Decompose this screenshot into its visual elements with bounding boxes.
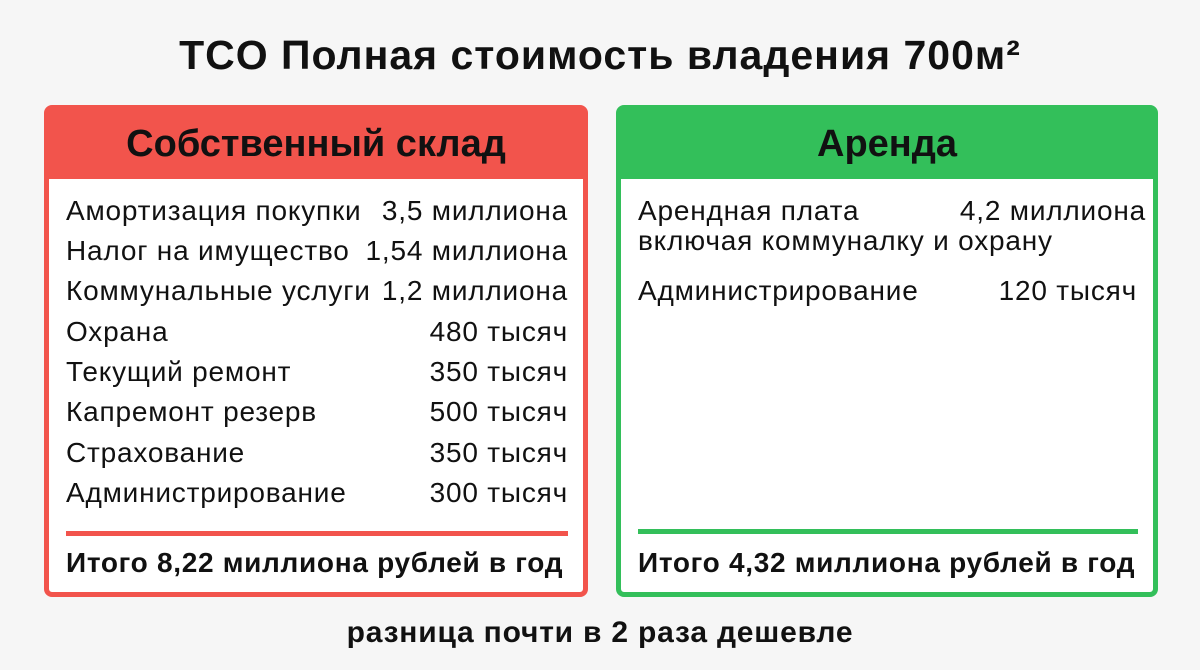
panel: rent <box>616 105 1158 597</box>
header: rent <box>621 109 1153 179</box>
cost list: own warehouse: 500 тысяч <box>430 396 568 427</box>
cost list: own warehouse: Коммунальные услуги <box>66 275 371 306</box>
cost list: rent: включая коммуналку и охрану <box>638 225 1053 256</box>
cost list: own warehouse: 3,5 миллиона <box>382 195 568 226</box>
cost list: rent: Администрирование <box>638 275 919 306</box>
cost list: own warehouse: 480 тысяч <box>430 316 568 347</box>
cost list: rent: 120 тысяч <box>999 275 1137 306</box>
cost list: own warehouse: 350 тысяч <box>430 437 568 468</box>
cost list: own warehouse: Амортизация покупки <box>66 195 362 226</box>
cost list: rent: 4,2 миллиона <box>960 195 1146 226</box>
panel: own warehouse <box>44 105 588 597</box>
total: own warehouse: Итого 8,22 миллиона рублей в год <box>66 547 563 578</box>
cost list: own warehouse: Администрирование <box>66 477 347 508</box>
cost list: own warehouse: 1,2 миллиона <box>382 275 568 306</box>
cost list: own warehouse: Капремонт резерв <box>66 396 317 427</box>
cost list: rent <box>638 195 1146 306</box>
cost list: own warehouse: 350 тысяч <box>430 356 568 387</box>
cost list: own warehouse: Охрана <box>66 316 168 347</box>
header: own warehouse <box>49 109 583 179</box>
total: rent: Итого 4,32 миллиона рублей в год <box>638 547 1135 578</box>
cost list: own warehouse: 300 тысяч <box>430 477 568 508</box>
cost list: own warehouse: Страхование <box>66 437 245 468</box>
cost list: own warehouse: Текущий ремонт <box>66 356 291 387</box>
cost list: own warehouse: 1,54 миллиона <box>366 235 568 266</box>
cost list: own warehouse: Налог на имущество <box>66 235 350 266</box>
header: own warehouse: Собственный склад <box>126 123 506 165</box>
title: TCO Полная стоимость владения 700м² <box>179 32 1021 78</box>
header: rent: Аренда <box>817 123 957 165</box>
cost list: rent: Арендная плата <box>638 195 859 226</box>
footer conclusion: разница почти в 2 раза дешевле <box>347 616 853 649</box>
cost list: own warehouse <box>66 195 568 508</box>
